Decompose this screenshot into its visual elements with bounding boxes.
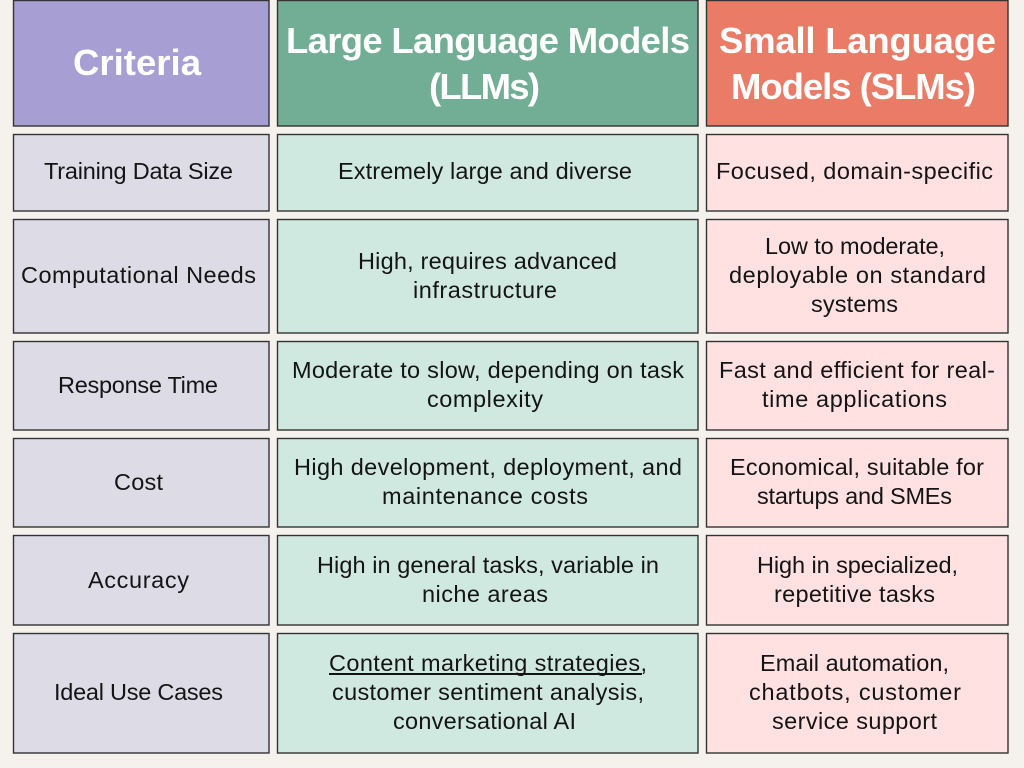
SLM cell: response time [706,342,1008,430]
LLM cell: cost: High development, deployment, and [294,454,682,480]
LLM cell: accuracy: High in general tasks, variable in [317,552,659,578]
LLM cell: computational needs [278,220,698,333]
LLM cell: cost: maintenance costs [382,483,588,509]
LLM cell: response time: Moderate to slow, depending on task [292,357,684,383]
SLM cell: computational needs: systems [811,291,898,317]
row: Cost [14,438,1008,527]
criteria cell: Response Time [14,342,269,430]
header: Small Language Models: Models (SLMs) [731,66,976,107]
criteria cell: Cost: Cost [114,469,163,495]
header: Large Language Models: (LLMs) [429,66,540,107]
criteria cell: Accuracy [14,536,269,625]
SLM cell: training data: Focused, domain-specific [716,158,993,184]
row: Ideal Use Cases [14,634,1008,753]
criteria cell: Training Data Size: Training Data Size [44,158,233,184]
row: Response Time [14,342,1008,430]
LLM cell: ideal use cases [278,634,698,753]
criteria cell: Response Time: Response Time [58,372,218,398]
LLM cell: computational needs: infrastructure [413,277,557,303]
SLM cell: accuracy: High in specialized, [757,552,958,578]
LLM cell: ideal use cases: customer sentiment analysis, [332,679,644,705]
LLM cell: response time: complexity [427,386,543,412]
criteria cell: Ideal Use Cases: Ideal Use Cases [54,679,223,705]
SLM cell: ideal use cases: service support [772,708,937,734]
SLM cell: response time: time applications [762,386,947,412]
header: Small Language Models [706,0,1008,126]
SLM cell: ideal use cases: Email automation, [760,650,949,676]
LLM cell: ideal use cases: conversational AI [393,708,576,734]
SLM cell: cost: Economical, suitable for [730,454,984,480]
LLM cell: response time [278,342,698,430]
row: Accuracy [14,536,1008,625]
LLM cell: accuracy: niche areas [422,581,548,607]
LLM cell: accuracy [278,536,698,625]
SLM cell: computational needs: Low to moderate, [765,233,945,259]
header: Large Language Models [278,0,698,126]
SLM cell: computational needs: deployable on standard [729,262,986,288]
SLM cell: computational needs [706,220,1008,333]
criteria cell: Accuracy: Accuracy [88,567,189,593]
row: Computational Needs [14,220,1008,333]
LLM cell: computational needs: High, requires advanced [358,248,617,274]
SLM cell: training data [706,134,1008,211]
LLM cell: training data: Extremely large and diverse [338,158,632,184]
criteria cell: Computational Needs: Computational Needs [21,262,256,288]
SLM cell: ideal use cases: chatbots, customer [749,679,961,705]
header: Criteria: Criteria [73,42,202,83]
header: Large Language Models: Large Language Models [286,20,690,61]
header: Small Language Models: Small Language [719,20,996,61]
criteria cell: Computational Needs [14,220,269,333]
SLM cell: accuracy: repetitive tasks [774,581,935,607]
criteria cell: Training Data Size [14,134,269,211]
criteria cell: Cost [14,438,269,527]
SLM cell: cost [706,438,1008,527]
criteria cell: Ideal Use Cases [14,634,269,753]
header: Criteria [14,0,269,126]
SLM cell: response time: Fast and efficient for real- [719,357,995,383]
LLM cell: training data [278,134,698,211]
LLM cell: cost [278,438,698,527]
LLM cell: ideal use cases: Content marketing strategies, [329,650,647,676]
SLM cell: ideal use cases [706,634,1008,753]
SLM cell: accuracy [706,536,1008,625]
row: Training Data Size [14,134,1008,211]
SLM cell: cost: startups and SMEs [757,483,952,509]
